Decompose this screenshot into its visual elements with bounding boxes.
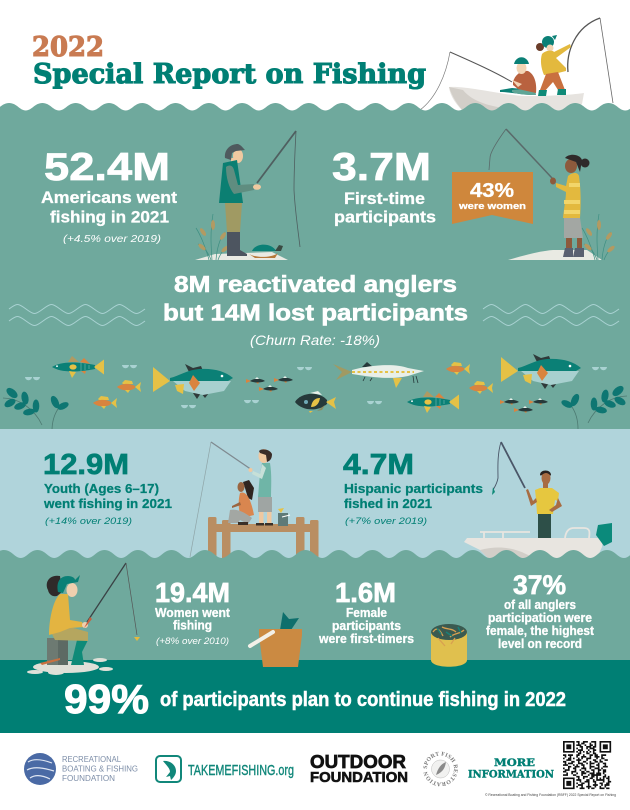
stat: 37% female anglers: participation were bbox=[488, 610, 592, 625]
stat: 19.4M women: Women went bbox=[155, 605, 231, 620]
logo: Recreational Boating and Fishing Foundation: RECREATIONAL bbox=[62, 754, 121, 764]
stat: 1.6M first-timers: were first-timers bbox=[318, 631, 414, 646]
fish: bluegill bbox=[295, 391, 336, 413]
stat: 52.4M Americans: (+4.5% over 2019) bbox=[63, 233, 161, 245]
illustration: woman fishing, catching banner bbox=[489, 129, 616, 260]
illustration: man fishing on a white boat bbox=[464, 442, 612, 560]
stat: 37% female anglers: level on record bbox=[498, 636, 582, 651]
logo: Outdoor Foundation bbox=[310, 752, 408, 786]
stat: 19.4M women: (+8% over 2010) bbox=[156, 636, 229, 646]
stat: 3.7M first-time participants bbox=[332, 146, 436, 226]
stat: 1.6M first-timers bbox=[318, 577, 414, 646]
dark teal band bbox=[0, 660, 630, 733]
illustration: two people fishing in a boat bbox=[420, 18, 613, 114]
QR code bbox=[563, 741, 611, 789]
stat: 4.7M Hispanic participants: fished in 2021 bbox=[344, 496, 432, 511]
stat: 1.6M first-timers: Female bbox=[346, 605, 387, 620]
logo: Recreational Boating and Fishing Foundation: FOUNDATION bbox=[62, 773, 115, 783]
title bbox=[32, 32, 426, 90]
stat: 37% female anglers bbox=[486, 570, 595, 651]
logo: Recreational Boating and Fishing Foundation bbox=[24, 753, 138, 785]
plants left bbox=[3, 386, 70, 431]
stat: 52.4M Americans: fishing in 2021 bbox=[50, 208, 169, 226]
more information label: INFORMATION bbox=[468, 768, 554, 780]
stat: 1.6M first-timers: participants bbox=[332, 618, 401, 633]
stat: 4.7M Hispanic participants: 4.7M bbox=[343, 449, 414, 481]
stat: 12.9M youth: (+14% over 2019) bbox=[45, 516, 132, 527]
decorative wave lines right bbox=[483, 304, 619, 326]
stat: 37% female anglers: of all anglers bbox=[504, 597, 576, 612]
heading: reactivated and lost anglers: 8M reactivated anglers bbox=[174, 271, 457, 297]
school of fish illustration bbox=[25, 354, 607, 413]
illustration: two kids fishing on a pier bbox=[190, 442, 318, 560]
logo: Outdoor Foundation: FOUNDATION bbox=[310, 770, 408, 786]
illustration: man fishing with turtle bbox=[195, 131, 300, 260]
stat: 12.9M youth: went fishing in 2021 bbox=[43, 496, 172, 511]
logo: Recreational Boating and Fishing Foundation: BOATING & FISHING bbox=[62, 764, 138, 774]
callout: 99% plan to continue: of participants plan to continue fishing in 2022 bbox=[160, 689, 566, 711]
stat: 12.9M youth: 12.9M bbox=[43, 449, 129, 481]
callout: 99% plan to continue: 99% bbox=[64, 676, 149, 722]
stat: 37% female anglers: 37% bbox=[513, 570, 566, 600]
more information label: MORE bbox=[494, 757, 535, 769]
callout: 99% plan to continue bbox=[64, 676, 566, 722]
banner: 43% were women: 43% bbox=[470, 180, 514, 202]
stat: 52.4M Americans: 52.4M bbox=[44, 146, 170, 189]
stat: 4.7M Hispanic participants: (+7% over 2019) bbox=[345, 516, 427, 527]
top water panel bbox=[0, 103, 630, 430]
logo: TakeMeFishing.org bbox=[156, 756, 294, 782]
copyright note: © Recreational Boating and Fishing Foundation (RBFF) 2022 Special Report on Fishing bbox=[485, 793, 616, 797]
banner: 43% were women bbox=[452, 172, 533, 224]
stat: 19.4M women bbox=[155, 577, 231, 646]
stat: 4.7M Hispanic participants: Hispanic participants bbox=[344, 481, 483, 496]
heading: reactivated and lost anglers: (Churn Rate: -18%) bbox=[250, 332, 380, 348]
stat: 4.7M Hispanic participants bbox=[343, 449, 483, 527]
plants right bbox=[560, 384, 627, 429]
light blue panel bbox=[0, 429, 630, 564]
heading: reactivated and lost anglers bbox=[163, 271, 468, 348]
stat: 3.7M first-time participants: participants bbox=[334, 208, 436, 226]
stat: 3.7M first-time participants: First-time bbox=[344, 190, 425, 208]
title: Special Report on Fishing bbox=[33, 58, 426, 90]
stat: 3.7M first-time participants: 3.7M bbox=[332, 146, 431, 189]
decorative wave lines left bbox=[9, 304, 145, 326]
stat: 52.4M Americans: Americans went bbox=[41, 189, 178, 207]
stat: 12.9M youth: Youth (Ages 6–17) bbox=[44, 481, 159, 496]
lower water panel bbox=[0, 550, 630, 661]
fish: sturgeon bbox=[333, 362, 424, 388]
logo: Outdoor Foundation: OUTDOOR bbox=[310, 752, 406, 772]
logo: TakeMeFishing.org: TAKEMEFISHING.org bbox=[188, 762, 294, 779]
heading: reactivated and lost anglers: but 14M lost participants bbox=[163, 300, 468, 326]
logo: Sport Fish Restoration seal: SPORT FISH RESTORATION bbox=[423, 752, 458, 786]
stat: 19.4M women: fishing bbox=[173, 618, 212, 632]
stat: 52.4M Americans bbox=[41, 146, 178, 245]
stat: 12.9M youth bbox=[43, 449, 172, 527]
stat: 37% female anglers: female, the highest bbox=[486, 623, 595, 638]
stat: 1.6M first-timers: 1.6M bbox=[335, 577, 396, 608]
title: 2022 bbox=[32, 32, 104, 63]
icon: yellow bait bucket bbox=[431, 624, 467, 667]
illustration: woman sitting and fishing bbox=[27, 563, 140, 675]
banner: 43% were women: were women bbox=[458, 201, 526, 212]
icon: orange bucket with fish tail bbox=[250, 612, 302, 667]
more information label bbox=[468, 757, 554, 780]
stat: 19.4M women: 19.4M bbox=[155, 577, 230, 608]
